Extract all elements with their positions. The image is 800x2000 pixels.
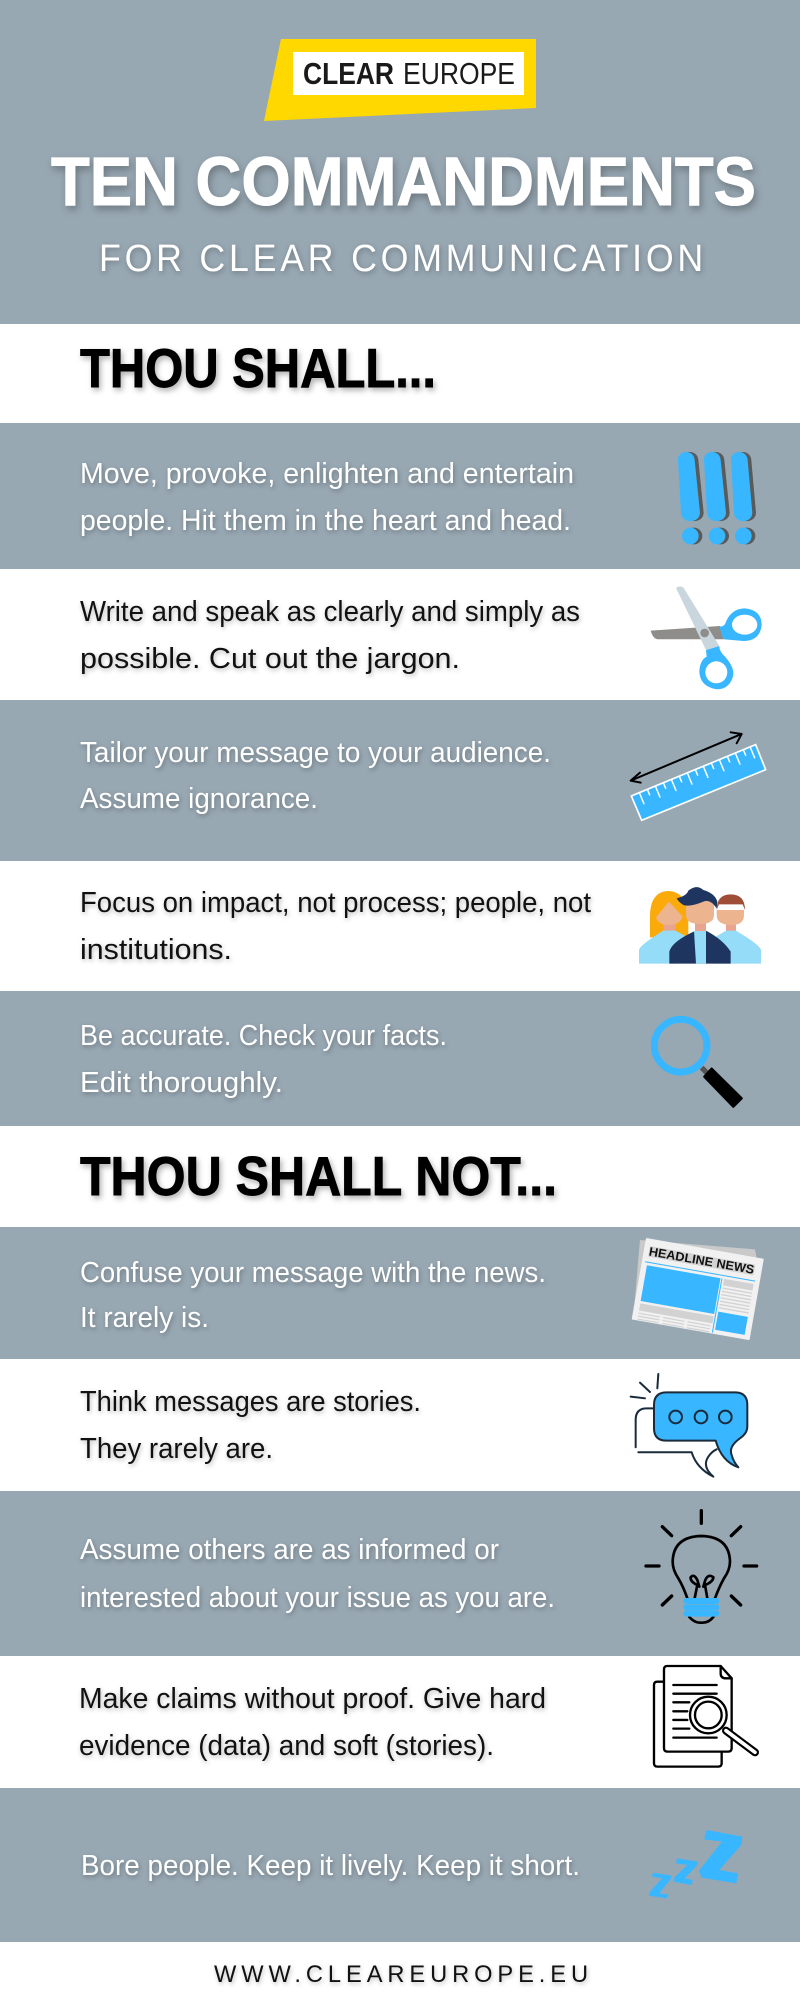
panel: commandment 1 xyxy=(0,423,800,569)
text: write and speak: possible. Cut out the jargon. xyxy=(80,643,460,675)
text: assume others xyxy=(80,1534,555,1614)
text: think messages: They rarely are. xyxy=(80,1433,273,1465)
panel: commandment 2 xyxy=(0,569,800,700)
icon: exclamation marks xyxy=(678,452,756,544)
logo: Clear Europe: EUROPE xyxy=(403,56,515,91)
icon: ruler and arrow xyxy=(631,732,766,820)
icon: document with magnifier xyxy=(654,1666,755,1767)
text: tailor your message: Assume ignorance. xyxy=(80,783,318,815)
text: be accurate: Edit thoroughly. xyxy=(80,1067,283,1099)
logo: Clear Europe: CLEAR xyxy=(303,56,394,91)
logo: Clear Europe xyxy=(264,39,536,121)
text: tailor your message xyxy=(80,737,551,815)
footer: website: WWW.CLEAREUROPE.EU xyxy=(214,1961,593,1988)
text: make claims: evidence (data) and soft (stories). xyxy=(79,1730,494,1762)
text: write and speak xyxy=(80,596,580,675)
icon: light bulb xyxy=(646,1511,757,1623)
icon: speech bubbles xyxy=(631,1374,747,1477)
text: think messages xyxy=(80,1386,421,1465)
panel: commandment 7 xyxy=(0,1359,800,1491)
panel: commandment 8 xyxy=(0,1491,800,1656)
text: think messages: Think messages are stories. xyxy=(80,1386,421,1418)
title: TEN COMMANDMENTS xyxy=(51,143,756,220)
text: bore people: Bore people. Keep it lively. Keep it short. xyxy=(81,1850,580,1882)
text: focus on impact: Focus on impact, not process; people, not xyxy=(80,887,591,919)
icon: three people xyxy=(639,887,761,964)
text: make claims: Make claims without proof. Give hard xyxy=(79,1683,546,1715)
text: tailor your message: Tailor your message to your audience. xyxy=(80,737,551,769)
panel: commandment 9 xyxy=(0,1656,800,1788)
text: confuse your message xyxy=(80,1257,546,1334)
text: move, provoke xyxy=(80,458,574,537)
subtitle: FOR CLEAR COMMUNICATION xyxy=(99,238,707,280)
icon: newspaper: HEADLINE NEWS xyxy=(648,1245,755,1277)
text: assume others: Assume others are as informed or xyxy=(80,1534,499,1566)
heading: Thou shall: THOU SHALL... xyxy=(80,337,436,399)
panel: commandment 5 xyxy=(0,991,800,1126)
text: focus on impact: institutions. xyxy=(80,934,232,966)
text: confuse your message: It rarely is. xyxy=(80,1302,209,1334)
heading: Thou shall not: THOU SHALL NOT... xyxy=(80,1145,557,1207)
icon: magnifying glass xyxy=(654,1019,742,1107)
panel: commandment 3 xyxy=(0,700,800,861)
panel: header xyxy=(0,0,800,324)
text: be accurate xyxy=(80,1020,447,1099)
text: move, provoke: Move, provoke, enlighten and entertain xyxy=(80,458,574,490)
text: move, provoke: people. Hit them in the heart and head. xyxy=(80,505,571,537)
text: be accurate: Be accurate. Check your facts. xyxy=(80,1020,447,1052)
text: make claims xyxy=(79,1683,546,1762)
panel: commandment 6 xyxy=(0,1227,800,1359)
icon: newspaper xyxy=(632,1238,764,1340)
panel: commandment 10 xyxy=(0,1788,800,1942)
text: assume others: interested about your issue as you are. xyxy=(80,1582,555,1614)
icon: zzz xyxy=(649,1830,742,1898)
text: write and speak: Write and speak as clearly and simply as xyxy=(80,596,580,628)
text: focus on impact xyxy=(80,887,591,966)
panel: commandment 4 xyxy=(0,861,800,991)
icon: scissors xyxy=(651,586,762,689)
text: confuse your message: Confuse your message with the news. xyxy=(80,1257,546,1289)
